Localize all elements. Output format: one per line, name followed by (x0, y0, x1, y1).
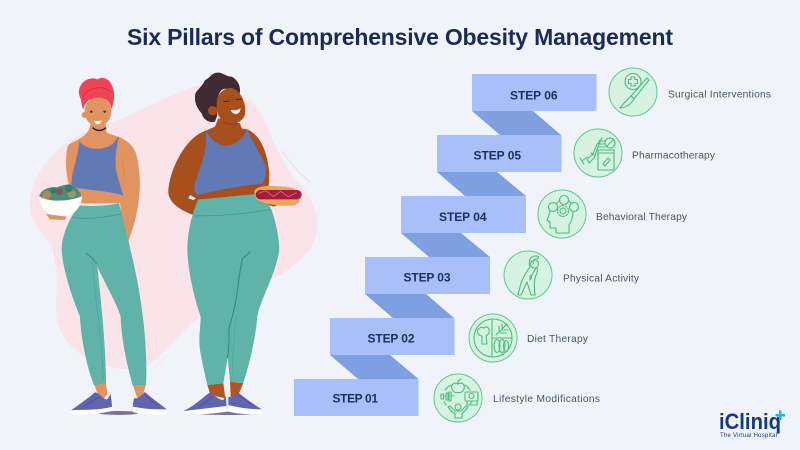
slim woman shoes (71, 392, 167, 415)
icon: physical activity (504, 251, 552, 299)
icon: pharmacotherapy (574, 129, 622, 177)
step 02 (330, 318, 454, 355)
label: lifestyle modifications: Lifestyle Modifications (493, 394, 600, 405)
step 03: STEP 03 (404, 270, 451, 284)
step 04 (401, 196, 526, 233)
label: behavioral therapy: Behavioral Therapy (596, 212, 688, 223)
slim woman ankles (94, 383, 146, 400)
icon: lifestyle modifications (434, 374, 482, 422)
figure: larger woman with hot dog (168, 73, 311, 415)
step 06 (472, 74, 596, 111)
fold connectors (330, 111, 561, 379)
slim woman red hair (79, 78, 114, 110)
title: Six Pillars of Comprehensive Obesity Management (127, 24, 673, 50)
label: diet therapy: Diet Therapy (527, 334, 589, 345)
larger woman crop top (194, 129, 266, 195)
logo: iCliniq: The Virtual Hospital (720, 433, 777, 439)
larger woman face (217, 88, 245, 124)
step 06: STEP 06 (510, 88, 558, 102)
step 05: STEP 05 (474, 148, 521, 162)
slim woman face (85, 97, 111, 126)
label: physical activity: Physical Activity (563, 274, 640, 284)
slim woman crop top (72, 136, 123, 196)
step 03 (365, 257, 490, 294)
step 01: STEP 01 (332, 392, 378, 406)
larger woman ankles (207, 382, 243, 398)
icon: surgical interventions (609, 68, 657, 116)
pink background blob (30, 85, 317, 369)
step 04: STEP 04 (439, 210, 487, 224)
label: pharmacotherapy: Pharmacotherapy (632, 150, 716, 162)
logo: iCliniq: iCliniq (719, 409, 781, 434)
figure: slim woman with salad (39, 78, 167, 415)
hot dog (254, 186, 302, 206)
larger woman leggings (187, 194, 279, 385)
slim woman skin (66, 123, 140, 242)
staircase ribbon (294, 74, 596, 416)
larger woman dark curly hair (195, 73, 240, 122)
slim woman leggings (62, 203, 146, 385)
label: surgical interventions: Surgical Interventions (668, 90, 771, 100)
larger woman skin (168, 118, 283, 215)
icon: behavioral therapy (538, 190, 586, 238)
step 02: STEP 02 (368, 332, 415, 346)
logo plus (776, 410, 785, 420)
icon: diet therapy (469, 314, 517, 362)
step 01 (294, 379, 418, 416)
larger woman shoes (184, 392, 262, 415)
step 05 (437, 135, 562, 172)
salad bowl (39, 196, 82, 218)
